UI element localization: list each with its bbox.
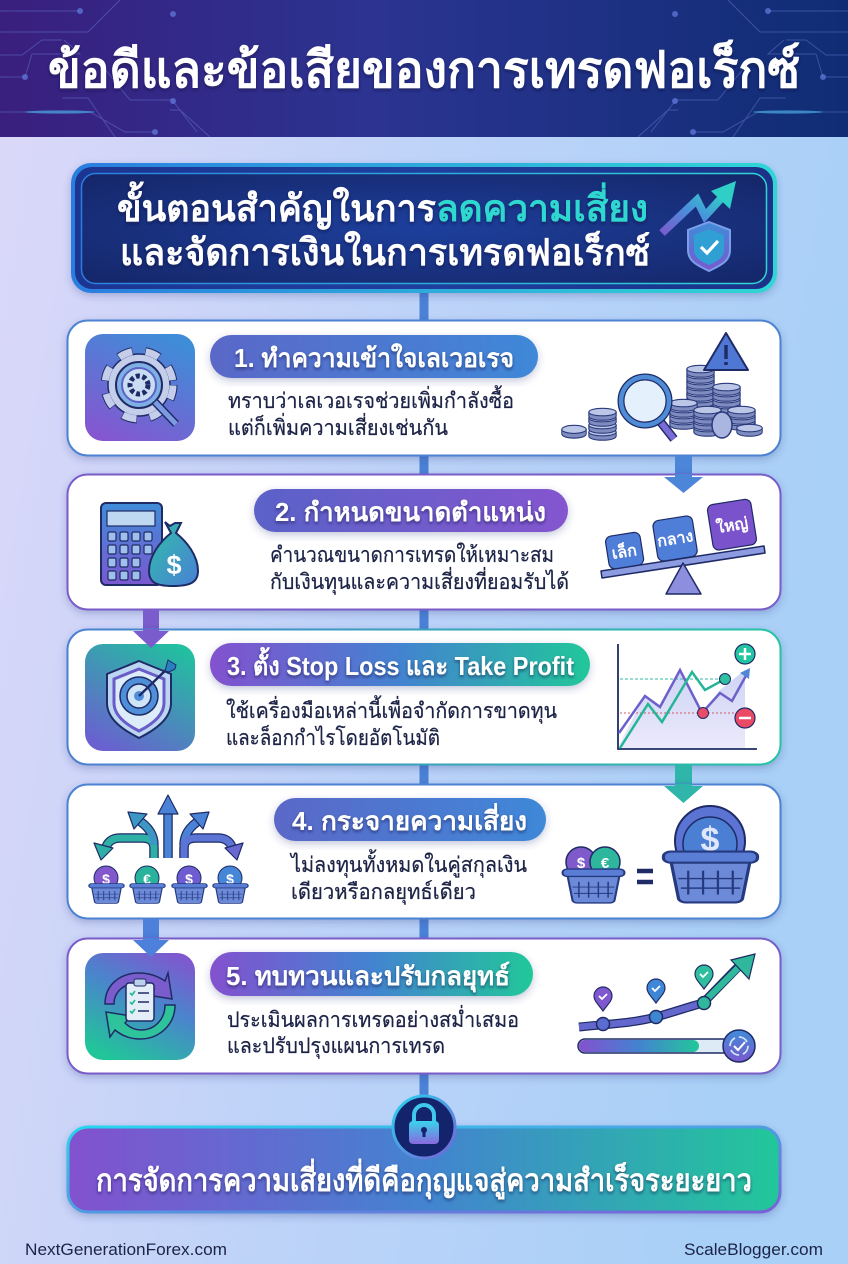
illustration: coins, magnifier, warning (562, 333, 762, 440)
icon: diverging arrows over four baskets: $ (102, 871, 110, 887)
illustration: seesaw with small medium large (601, 499, 765, 594)
illustration: small baskets equals big basket: € (601, 855, 610, 872)
illustration: seesaw with small medium large: ใหญ่ (715, 513, 749, 538)
step 1 pill heading: 1. ทำความเข้าใจเลเวอเรจ (234, 343, 514, 373)
conclusion text: การจัดการความเสี่ยงที่ดีคือกุญแจสู่ความสำเร็จระยะยาว (96, 1158, 752, 1200)
icon: rising arrow and shield (662, 181, 736, 271)
step 2 pill heading: 2. กำหนดขนาดตำแหน่ง (275, 497, 546, 527)
step 3 description: และล็อกกำไรโดยอัตโนมัติ (226, 723, 440, 750)
icon: diverging arrows over four baskets (89, 795, 248, 903)
connector line: banner to footer (420, 293, 428, 1103)
icon: padlock badge (393, 1096, 455, 1158)
icon tile: gear and magnifier (85, 334, 195, 441)
icon: calculator and money bag (101, 503, 198, 586)
step 3 description: ใช้เครื่องมือเหล่านี้เพื่อจำกัดการขาดทุน (226, 695, 557, 724)
illustration: small baskets equals big basket: $ (701, 821, 720, 859)
arrow overlap (664, 474, 703, 493)
step 5 description: และปรับปรุงแผนการเทรด (227, 1034, 445, 1059)
step 1 pill heading (210, 335, 538, 378)
arrow overlap (133, 629, 169, 648)
panel: step 4 (68, 784, 780, 918)
step 4 pill heading (274, 798, 546, 841)
panel: step 1 (68, 320, 780, 456)
step 5 description: ประเมินผลการเทรดอย่างสม่ำเสมอ (227, 1005, 519, 1032)
icon: diverging arrows over four baskets: $ (226, 871, 234, 887)
panel: step 2 (68, 474, 780, 610)
step 4 description: เดียวหรือกลยุทธ์เดียว (291, 880, 476, 905)
icon: calculator and money bag: $ (166, 550, 182, 580)
arrow: step 2 to 3 (133, 610, 169, 648)
step 3 pill heading: 3. ตั้ง Stop Loss และ Take Profit (227, 646, 574, 681)
footer: left credit: NextGenerationForex.com (25, 1241, 227, 1259)
icon: diverging arrows over four baskets: € (143, 871, 151, 887)
step 4 description: ไม่ลงทุนทั้งหมดในคู่สกุลเงิน (289, 849, 527, 878)
footer: right credit: ScaleBlogger.com (684, 1241, 823, 1259)
panel: step 3 (68, 629, 780, 764)
banner heading: ขั้นตอนสำคัญในการ (117, 181, 436, 230)
banner heading: ลดความเสี่ยง (436, 182, 648, 229)
step 2 pill heading (254, 489, 568, 532)
icon tile: shield and target (85, 644, 195, 751)
arrow: step 1 to 2 (664, 456, 703, 493)
arrow: step 3 to 4 (664, 765, 703, 803)
step 1 description: ทราบว่าเลเวอเรจช่วยเพิ่มกำลังซื้อ (228, 385, 514, 413)
illustration: small baskets equals big basket: $ (577, 855, 586, 872)
illustration: small baskets equals big basket (563, 806, 758, 903)
step 4 pill heading: 4. กระจายความเสี่ยง (292, 802, 527, 836)
panel: step 5 (68, 938, 780, 1074)
step 2 description: กับเงินทุนและความเสี่ยงที่ยอมรับได้ (270, 567, 569, 595)
banner heading: และจัดการเงินในการเทรดฟอเร็กซ์ (120, 229, 650, 273)
arrow overlap (133, 938, 169, 957)
header band (0, 0, 848, 137)
arrow overlap (664, 784, 703, 803)
arrow: step 4 to 5 (133, 919, 169, 957)
step 5 pill heading: 5. ทบทวนและปรับกลยุทธ์ (226, 961, 510, 993)
step 1 description: แต่ก็เพิ่มความเสี่ยงเช่นกัน (228, 413, 448, 440)
step 3 pill heading (210, 643, 590, 686)
title: ข้อดีและข้อเสียของการเทรดฟอเร็กซ์ (48, 39, 800, 98)
step 2 description: คำนวณขนาดการเทรดให้เหมาะสม (270, 542, 554, 567)
panel: conclusion banner (68, 1127, 780, 1212)
chart: stop loss and take profit lines (618, 644, 757, 749)
panel: banner (71, 163, 777, 293)
icon: diverging arrows over four baskets: $ (185, 871, 193, 887)
icon tile: cycle and checklist (85, 953, 195, 1060)
step 5 pill heading (210, 952, 533, 996)
illustration: seesaw with small medium large: กลาง (656, 528, 694, 551)
illustration: seesaw with small medium large: เล็ก (610, 538, 638, 563)
illustration: milestones rising and progress bar (578, 954, 755, 1062)
